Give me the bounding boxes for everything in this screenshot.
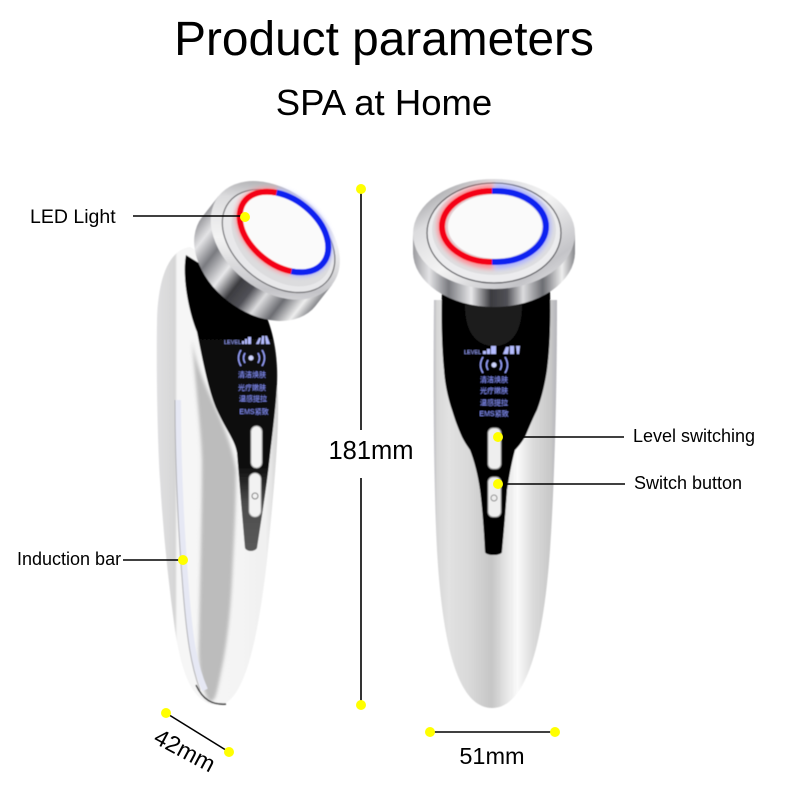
dimension: height 181mm: 181mm xyxy=(328,437,414,465)
device: left angled view xyxy=(157,157,363,705)
left device screen text xyxy=(238,370,269,416)
right device wave icon xyxy=(480,357,508,373)
left device wave icon xyxy=(238,350,264,366)
title: Product parameters xyxy=(174,13,594,66)
right device level button xyxy=(488,428,501,469)
right device level indicator: LEVEL xyxy=(464,350,481,356)
callout: Level switching: Level switching xyxy=(633,426,755,446)
device: right front view xyxy=(413,179,575,708)
right device power glyph xyxy=(491,495,497,501)
left device screen text: 光疗嫩肤 xyxy=(238,383,266,392)
dimension: depth 42mm xyxy=(150,708,234,777)
left device head xyxy=(171,157,363,345)
dimension: width 51mm xyxy=(425,727,560,769)
left device screen text: 温感提拉 xyxy=(239,394,267,403)
right device body xyxy=(434,300,557,708)
left device induction bar xyxy=(178,400,205,690)
right device screen text xyxy=(479,375,509,418)
left device screen text: EMS紧致 xyxy=(239,407,269,416)
right device screen text: 清洁焕肤 xyxy=(480,375,508,384)
left device bar edge line xyxy=(175,400,200,690)
dimension: height 181mm xyxy=(328,184,414,710)
right device black panel xyxy=(442,290,550,555)
left device gray facet xyxy=(192,340,236,701)
callout: LED Light: LED Light xyxy=(30,206,116,228)
callout: Switch button: Switch button xyxy=(634,473,742,493)
right device power button xyxy=(488,477,501,517)
left device black panel xyxy=(185,255,277,551)
right device panel sheen xyxy=(465,305,522,346)
dimension: width 51mm: 51mm xyxy=(459,743,525,769)
callout: Switch button xyxy=(493,473,742,493)
right device LED ring xyxy=(441,188,547,265)
left device body xyxy=(157,247,278,705)
left device level indicator: LEVEL xyxy=(224,340,241,346)
left device screen text: 清洁焕肤 xyxy=(238,370,266,379)
left device power glyph xyxy=(252,493,258,499)
callout: LED Light xyxy=(30,206,250,228)
subtitle: SPA at Home xyxy=(276,82,492,123)
left device LED ring xyxy=(224,175,344,289)
left device level button xyxy=(251,426,262,468)
callout: Level switching xyxy=(493,426,755,446)
left device level indicator xyxy=(224,336,270,346)
right device level indicator xyxy=(464,346,520,356)
right device screen text: 光疗嫩肤 xyxy=(480,386,508,395)
callout: Induction bar: Induction bar xyxy=(17,549,121,569)
left device bottom edge line xyxy=(196,685,226,704)
dimension: depth 42mm: 42mm xyxy=(150,724,220,777)
callout: Induction bar xyxy=(17,549,188,569)
right device screen text: 温感提拉 xyxy=(480,398,508,407)
left device power button xyxy=(249,473,261,517)
right device head xyxy=(413,179,575,307)
right device screen text: EMS紧致 xyxy=(479,409,509,418)
